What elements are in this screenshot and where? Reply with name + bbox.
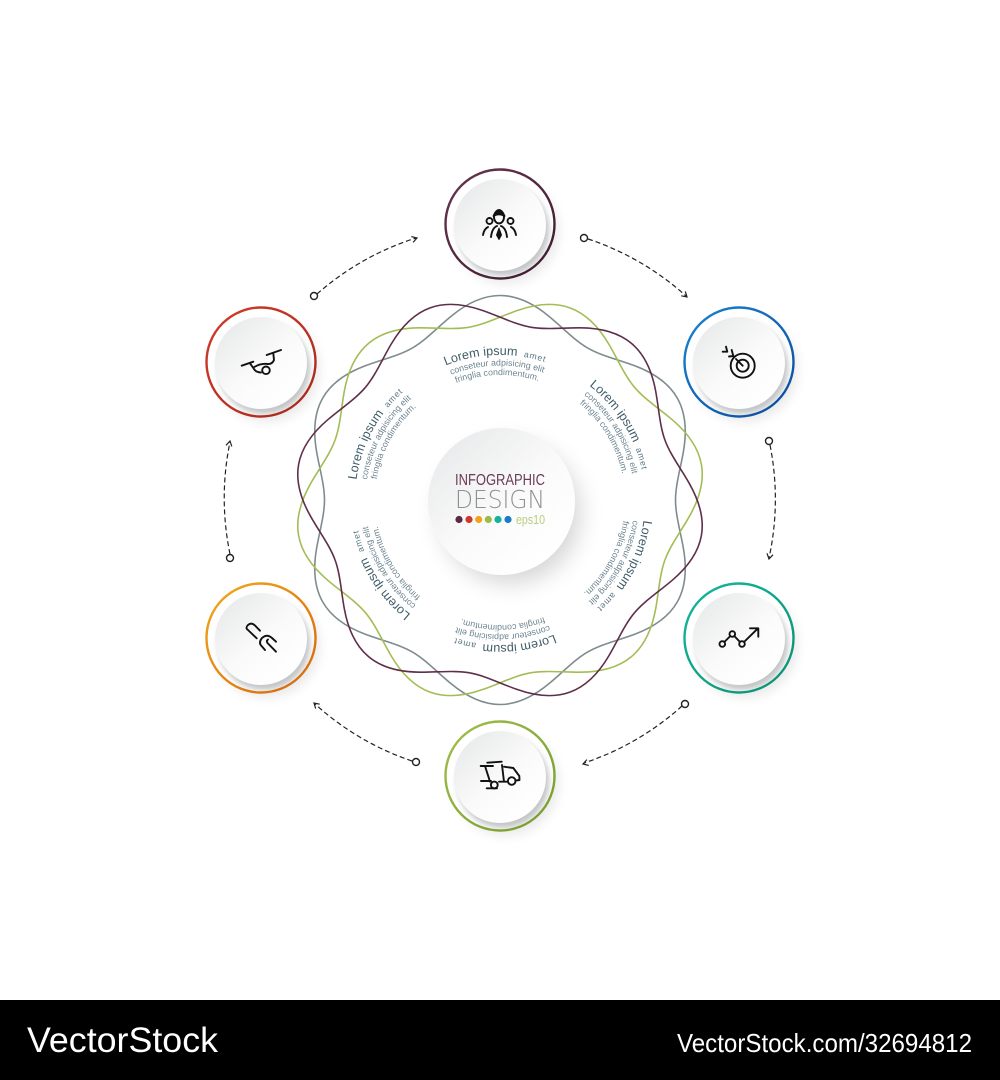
heading: design: DESIGN [455, 485, 545, 514]
colour dots [455, 516, 512, 523]
centre disc [428, 428, 580, 583]
text block: upper left: conseteur adpisicing elit [362, 395, 412, 479]
text block: bottom: conseteur adpisicing elit [455, 626, 550, 641]
node: people, maroon ring [446, 170, 558, 283]
text block: bottom [454, 617, 556, 654]
node: chart, teal ring [684, 584, 797, 697]
text block: upper right: conseteur adpisicing elit [585, 392, 638, 474]
icon: growth chart [720, 628, 758, 647]
heading: infographic: INFOGRAPHIC [455, 472, 545, 489]
icon: handshake [242, 350, 281, 374]
dashed arrows [224, 234, 775, 766]
node: truck, green ring [446, 722, 558, 835]
brand: VectorStock [27, 1021, 219, 1060]
wave: green [222, 232, 778, 768]
wave: grey [279, 296, 721, 704]
footer bar [0, 1000, 1000, 1080]
text block: top [444, 346, 546, 383]
arrow: top-left to top [310, 237, 417, 300]
node: target, blue ring [684, 308, 797, 421]
text block: lower left: conseteur adpisicing elit [362, 526, 415, 608]
url: VectorStock.com/32694812 [677, 1028, 972, 1058]
text block: top: conseteur adpisicing elit [450, 359, 545, 374]
icon: target [723, 347, 755, 378]
arrow: top-right to bottom-right [766, 438, 775, 559]
text block: upper right: Lorem ipsum amet [590, 380, 647, 470]
arrow: top to top-right [580, 234, 687, 297]
text block: upper left: Lorem ipsum amet [348, 389, 403, 479]
text block: bottom: Lorem ipsum amet [454, 634, 556, 654]
icon: people [483, 210, 516, 240]
text block: upper left: fringlia condimentum. [370, 406, 416, 479]
wavy rings [199, 201, 801, 799]
text block: lower left: Lorem ipsum amet [353, 530, 410, 620]
text block: lower right: Lorem ipsum amet [597, 521, 652, 611]
text block: lower left: fringlia condimentum. [374, 526, 420, 600]
label: eps10: eps10 [516, 512, 545, 527]
node: handshake, red ring [206, 308, 319, 421]
icon: connector [246, 624, 276, 652]
arrow: bottom-left to top-left [224, 441, 234, 562]
text block: lower right: conseteur adpisicing elit [588, 521, 638, 605]
wave: maroon [199, 201, 801, 799]
text block: upper right: fringlia condimentum. [580, 400, 626, 474]
arrow: bottom to bottom-left [314, 703, 420, 766]
node: plug, orange ring [206, 584, 319, 697]
text block: lower right: fringlia condimentum. [584, 521, 630, 594]
text block: top: fringlia condimentum. [454, 368, 538, 383]
text block: top: Lorem ipsum amet [444, 346, 546, 366]
arrow: bottom-right to bottom [583, 700, 688, 765]
text block: bottom: fringlia condimentum. [462, 617, 546, 632]
text blocks around the centre [348, 346, 652, 654]
icon: truck [481, 762, 520, 788]
